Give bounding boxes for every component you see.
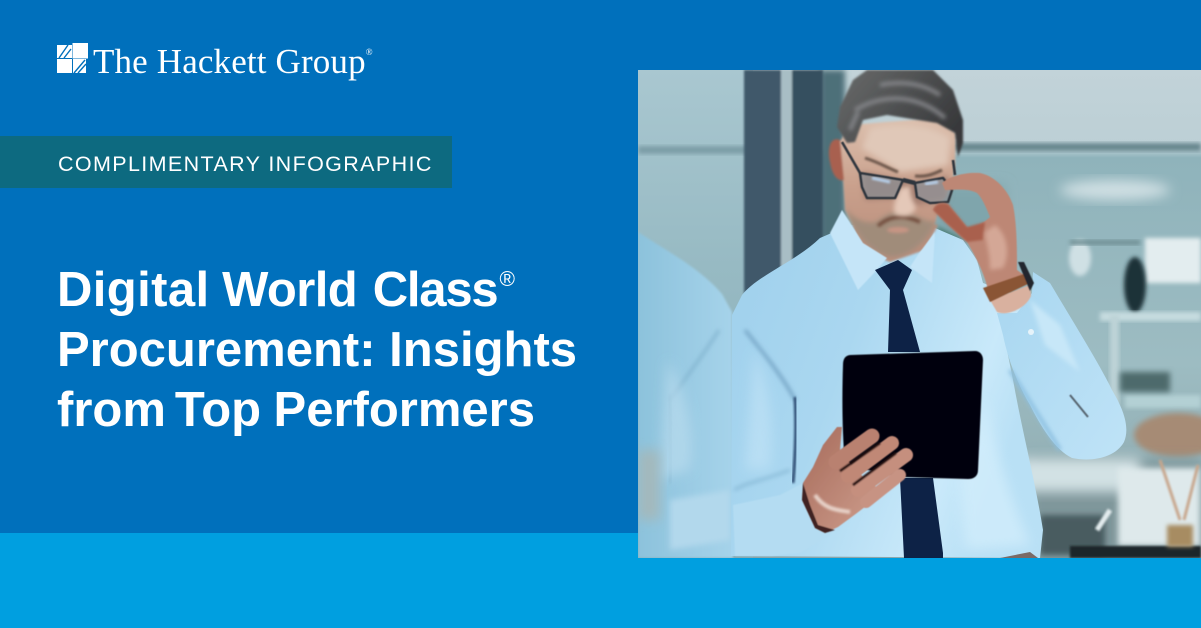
label band: complimentary infographic: COMPLIMENTARY INFOGRAPHIC — [58, 152, 433, 176]
man: neck and face — [829, 118, 956, 262]
reflection of the man in the glass — [638, 232, 733, 558]
belt buckle area — [1000, 552, 1038, 558]
lens reflections — [872, 178, 938, 184]
title line 3: from Top Performers — [57, 383, 535, 437]
man: eyebrows — [865, 158, 942, 176]
beard — [846, 208, 936, 257]
left shirt cuff — [733, 483, 835, 556]
wrist below watch — [990, 285, 1031, 313]
logo: The Hackett Group — [57, 42, 373, 81]
nose — [894, 186, 916, 216]
man: tie — [875, 260, 943, 558]
logo wordmark: The Hackett Group® — [93, 42, 373, 81]
hair highlights — [850, 83, 945, 130]
forehead highlight — [862, 125, 950, 172]
man: tablet — [842, 351, 983, 479]
bottom light blue band — [0, 533, 1201, 628]
label band: complimentary infographic — [0, 136, 452, 188]
man: right sleeve raised — [997, 272, 1126, 459]
man: shirt torso — [731, 225, 1043, 558]
man: hair — [837, 70, 963, 157]
icon: logo squares — [57, 43, 88, 73]
man: collar — [830, 210, 935, 290]
title — [57, 263, 577, 437]
man: glasses — [842, 142, 955, 203]
title line 1: Digital World Class® — [57, 263, 515, 317]
man: wristwatch — [983, 262, 1034, 302]
photo: businessman adjusting glasses while reading a tablet — [638, 70, 1201, 558]
photo background: blurred office — [638, 70, 1201, 558]
eye shadow — [862, 172, 948, 205]
title line 2: Procurement: Insights — [57, 323, 577, 377]
man: raised hand adjusting glasses — [933, 173, 1031, 313]
ear — [829, 139, 844, 180]
man: left hand holding tablet — [802, 427, 906, 533]
dark window frame column — [744, 70, 823, 310]
